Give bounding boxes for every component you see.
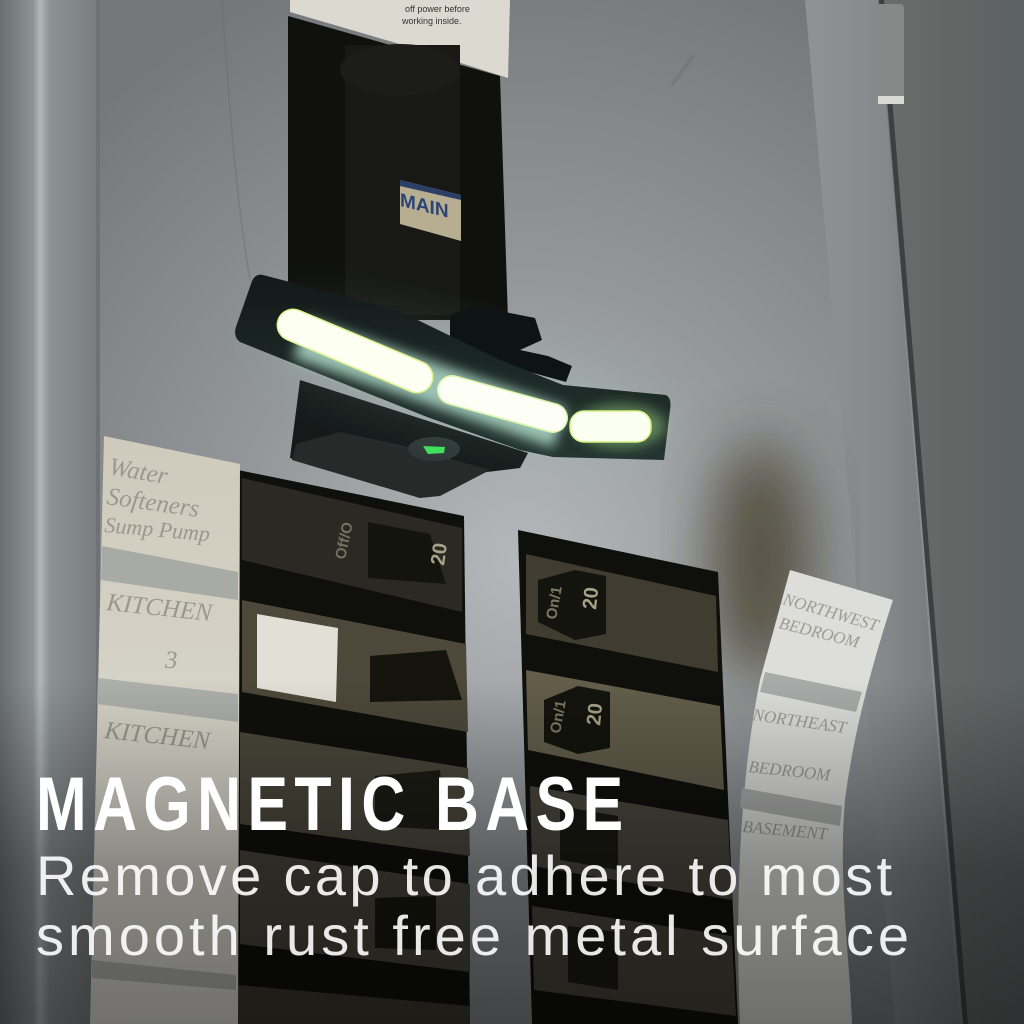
bottom fade overlay: [0, 680, 1024, 1024]
panel: breaker bank right: [518, 530, 738, 1024]
breaker 1: [242, 478, 462, 612]
breaker 4: [240, 850, 470, 972]
title: MAGNETIC BASE: [36, 762, 623, 847]
main label: MAIN: [400, 190, 449, 223]
light panel: right: [570, 411, 651, 442]
panel: left handwritten label strip: Sump Pump: [104, 512, 211, 546]
panel: warning sticker: off power before: [405, 4, 470, 14]
light panel: left: [293, 325, 417, 377]
text block: subtitle: smooth rust free metal surface: [36, 904, 909, 967]
breaker 1: On/1: [543, 585, 566, 621]
light panel: centre: [452, 390, 553, 418]
breaker 3: [240, 732, 470, 856]
indicator: green power light: [423, 446, 445, 454]
breaker 1: [526, 554, 718, 672]
panel: warning sticker: working inside.: [401, 16, 462, 26]
breaker 4: [532, 906, 736, 1016]
breaker 2: 20: [583, 702, 607, 727]
icon: work light bar: [235, 275, 671, 467]
panel: warning sticker: [290, 0, 510, 78]
panel: right handwritten label strip: NORTHWEST: [780, 589, 882, 635]
text block: subtitle: Remove cap to adhere to most: [36, 844, 892, 907]
breaker 2: [242, 600, 468, 732]
panel: left handwritten label strip: [90, 436, 240, 1024]
panel: right handwritten label strip: NORTHEAST: [750, 705, 849, 737]
panel: right handwritten label strip: BASEMENT: [742, 817, 830, 844]
breaker 1: 20: [427, 542, 452, 567]
main label: [400, 180, 461, 241]
breaker 1: 20: [579, 586, 603, 611]
panel: right handwritten label strip: BEDROOM: [777, 613, 862, 652]
panel: left handwritten label strip: KITCHEN: [104, 589, 215, 627]
text block: subtitle: [36, 844, 909, 967]
breaker 3: [530, 786, 732, 900]
breaker 2: On/1: [547, 699, 570, 735]
panel: left handwritten label strip: Softeners: [105, 483, 201, 523]
panel: left handwritten label strip: Water: [107, 453, 170, 490]
icon: magnetic base of the lamp: [290, 380, 528, 498]
panel: right handwritten label strip: [738, 570, 893, 1024]
panel: breaker bank left: [238, 470, 470, 1024]
breaker 1: Off/O: [332, 520, 357, 561]
panel: left handwritten label strip: 3: [164, 647, 178, 674]
breaker 2: [526, 670, 724, 790]
panel: left handwritten label strip: KITCHEN: [102, 717, 213, 755]
panel: main breaker: [288, 16, 508, 320]
panel: right handwritten label strip: BEDROOM: [748, 757, 832, 785]
